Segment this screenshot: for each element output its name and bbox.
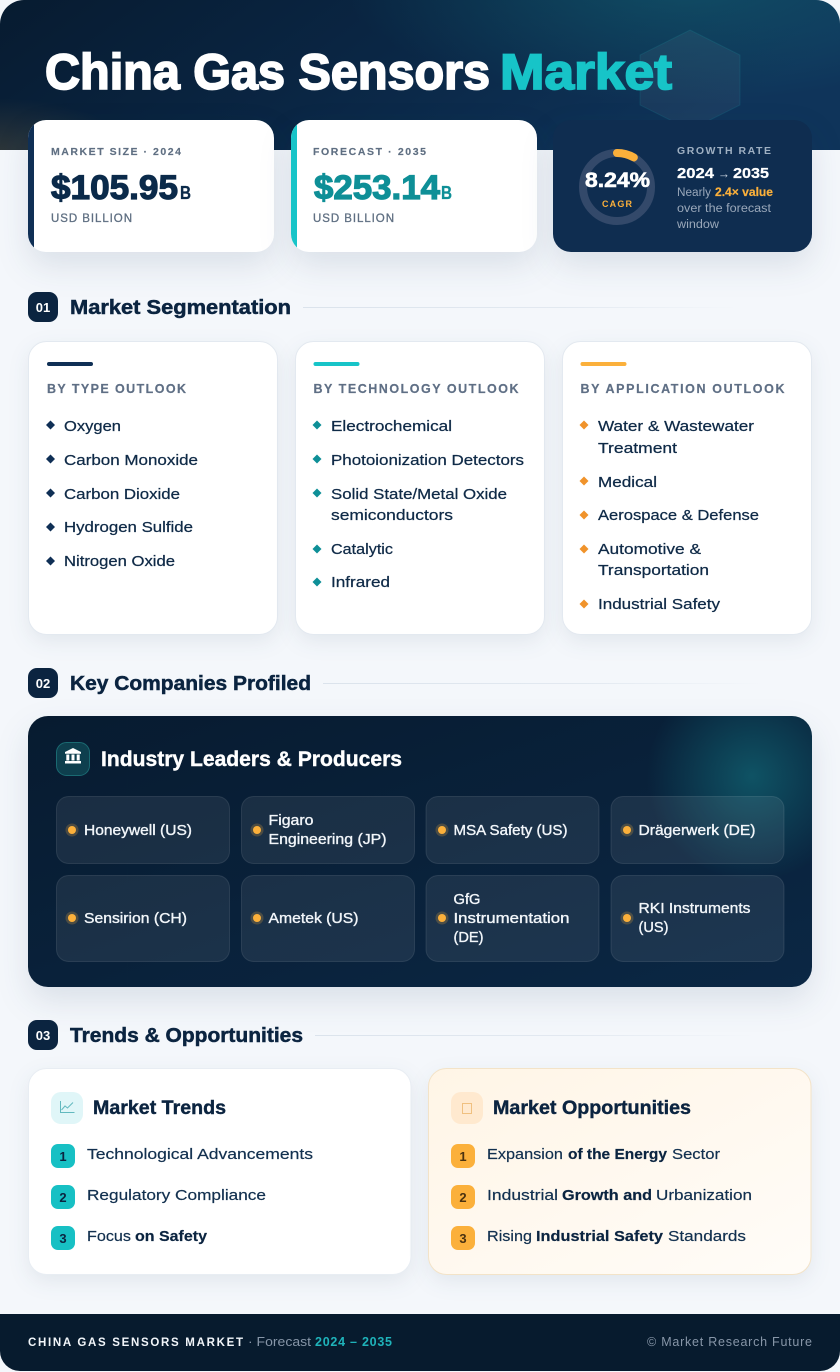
company: MSA Safety: MSA Safety (US) [454, 823, 568, 839]
panel: market trends [28, 1068, 411, 1274]
company: Honeywell [56, 796, 230, 864]
panel: by type outlook: BY TYPE OUTLOOK [47, 382, 186, 396]
opportunity 1 [451, 1144, 720, 1168]
stat card: market size 2024 [28, 120, 274, 252]
trend 2: 2 [59, 1190, 67, 1205]
list: technology items [312, 418, 524, 591]
section heading 03: Trends & Opportunities [70, 1025, 303, 1047]
company: RKI Instruments [611, 876, 784, 962]
company: Dragerwerk [611, 796, 784, 864]
title: Market [500, 44, 672, 100]
opportunity 3: Industrial Safety [536, 1228, 664, 1245]
list: type items: Hydrogen Sulfide [64, 519, 193, 536]
stat card: growth rate: → [718, 166, 730, 181]
trend 1: Technological Advancements [87, 1146, 313, 1163]
stat card: growth rate: 2.4× value [715, 187, 773, 199]
list: type items: Oxygen [64, 418, 121, 435]
stat card: forecast 2035: $253.14 [314, 169, 440, 207]
icon: chart [51, 1092, 83, 1124]
opportunity 3: Rising [487, 1228, 532, 1245]
stat card: growth rate: GROWTH RATE [677, 145, 771, 157]
stat card: market size 2024: $105.95 [51, 169, 178, 207]
stat card: growth rate: 2035 [733, 165, 769, 182]
company: RKI Instruments: RKI Instruments [638, 901, 750, 917]
opportunity 2: Industrial [487, 1187, 558, 1204]
footer: 2024 – 2035 [315, 1335, 392, 1349]
icon: bank [56, 742, 90, 776]
trend 3: Focus [87, 1228, 131, 1245]
list: application items: Medical [598, 474, 657, 491]
list: technology items: Photoionization Detectors [331, 452, 524, 469]
company: Figaro Engineering [242, 796, 414, 864]
trend 1: 1 [59, 1149, 67, 1164]
panel: by technology outlook [296, 342, 544, 634]
list: application items [580, 418, 759, 613]
list: application items: Aerospace & Defense [598, 507, 759, 524]
section heading 01: Market Segmentation [70, 297, 291, 319]
decorative hexagon [640, 30, 740, 130]
list: application items: Treatment [598, 440, 678, 457]
stat card: growth rate [553, 120, 812, 252]
stat card: growth rate: over the forecast [677, 203, 772, 215]
company: Sensirion: Sensirion (CH) [84, 911, 187, 927]
stat card: forecast 2035 [291, 120, 537, 252]
opportunity 2 [451, 1185, 752, 1209]
footer [0, 1314, 840, 1371]
company: RKI Instruments: (US) [638, 920, 668, 936]
opportunity 1: 1 [459, 1149, 467, 1164]
company: Dragerwerk: Drägerwerk (DE) [638, 823, 756, 839]
trend 2: Regulatory Compliance [87, 1187, 266, 1204]
list: type items: Carbon Dioxide [64, 486, 180, 503]
section heading 03 [28, 1020, 755, 1050]
company: GfG Instrumentation: (DE) [454, 930, 484, 946]
section heading 02 [28, 668, 763, 698]
opportunity 2: Growth and [562, 1187, 652, 1204]
section heading 02: Key Companies Profiled [70, 673, 311, 695]
panel: market trends: Market Trends [93, 1098, 226, 1119]
opportunity 2: Urbanization [656, 1187, 752, 1204]
list: type items [46, 418, 198, 570]
opportunity 1: Sector [672, 1146, 720, 1163]
list: technology items: Electrochemical [331, 418, 452, 435]
list: type items: Nitrogen Oxide [64, 553, 175, 570]
list: technology items: semiconductors [331, 507, 453, 524]
opportunity 2: 2 [459, 1190, 467, 1205]
CAGR ring [583, 153, 651, 221]
stat card: forecast 2035: FORECAST · 2035 [313, 146, 426, 158]
panel: by application outlook [562, 342, 812, 634]
company: MSA Safety [426, 796, 599, 864]
list: technology items: Solid State/Metal Oxide [331, 486, 507, 503]
panel: industry leaders and producers [28, 716, 812, 987]
panel: by technology outlook: BY TECHNOLOGY OUTLOOK [314, 382, 518, 396]
footer: CHINA GAS SENSORS MARKET [28, 1337, 243, 1349]
list: application items: Industrial Safety [598, 596, 721, 613]
list: application items: Water & Wastewater [598, 418, 754, 435]
panel: industry leaders and producers: Industry Leaders & Producers [101, 748, 402, 771]
trend 1 [51, 1144, 313, 1168]
section heading 03: 03 [36, 1028, 50, 1043]
header banner [0, 0, 840, 150]
company: Sensirion [56, 876, 230, 962]
trend 3: on Safety [135, 1228, 208, 1245]
company: Honeywell: Honeywell (US) [84, 823, 192, 839]
opportunity 3: Standards [668, 1228, 746, 1245]
stat card: growth rate: window [676, 219, 720, 231]
opportunity 1: of the Energy [568, 1146, 668, 1163]
company: GfG Instrumentation: Instrumentation [454, 911, 570, 927]
stat card: forecast 2035: USD BILLION [313, 213, 394, 225]
company: GfG Instrumentation: GfG [454, 892, 480, 908]
panel: market opportunities [428, 1068, 811, 1274]
section heading 02: 02 [36, 676, 50, 691]
section heading 01: 01 [36, 300, 50, 315]
company: Ametek: Ametek (US) [268, 911, 358, 927]
stat card: market size 2024: MARKET SIZE · 2024 [51, 146, 181, 158]
CAGR ring: CAGR [602, 199, 632, 209]
CAGR ring: 8.24% [585, 169, 650, 192]
stat card: growth rate: 2024 [677, 165, 715, 182]
opportunity 1: Expansion [487, 1146, 563, 1163]
company: Figaro Engineering: Figaro [268, 813, 314, 829]
company: Figaro Engineering: Engineering (JP) [268, 832, 386, 848]
list: technology items: Infrared [331, 574, 390, 591]
opportunity 3: 3 [459, 1231, 467, 1246]
trend 3: 3 [59, 1231, 67, 1246]
icon: opportunity placeholder [451, 1092, 483, 1124]
list: type items: Carbon Monoxide [64, 452, 198, 469]
panel: market opportunities: Market Opportunities [493, 1098, 691, 1119]
panel: by application outlook: BY APPLICATION OUTLOOK [580, 382, 784, 396]
footer: · Forecast [248, 1335, 312, 1349]
stat card: market size 2024: USD BILLION [51, 213, 132, 225]
trend 2 [51, 1185, 266, 1209]
section heading 01 [28, 292, 738, 322]
company: GfG Instrumentation [426, 876, 599, 962]
stat card: market size 2024: B [180, 183, 191, 203]
trend 3 [51, 1226, 208, 1250]
list: application items: Automotive & [598, 541, 701, 558]
stat card: growth rate: Nearly [677, 187, 711, 199]
opportunity 3 [451, 1226, 746, 1250]
list: application items: Transportation [598, 562, 709, 579]
panel: by type outlook [28, 342, 278, 634]
list: technology items: Catalytic [331, 541, 394, 558]
footer: © Market Research Future [647, 1335, 812, 1349]
company: Ametek [242, 876, 414, 962]
title: China Gas Sensors [45, 44, 490, 100]
stat card: forecast 2035: B [441, 183, 452, 203]
